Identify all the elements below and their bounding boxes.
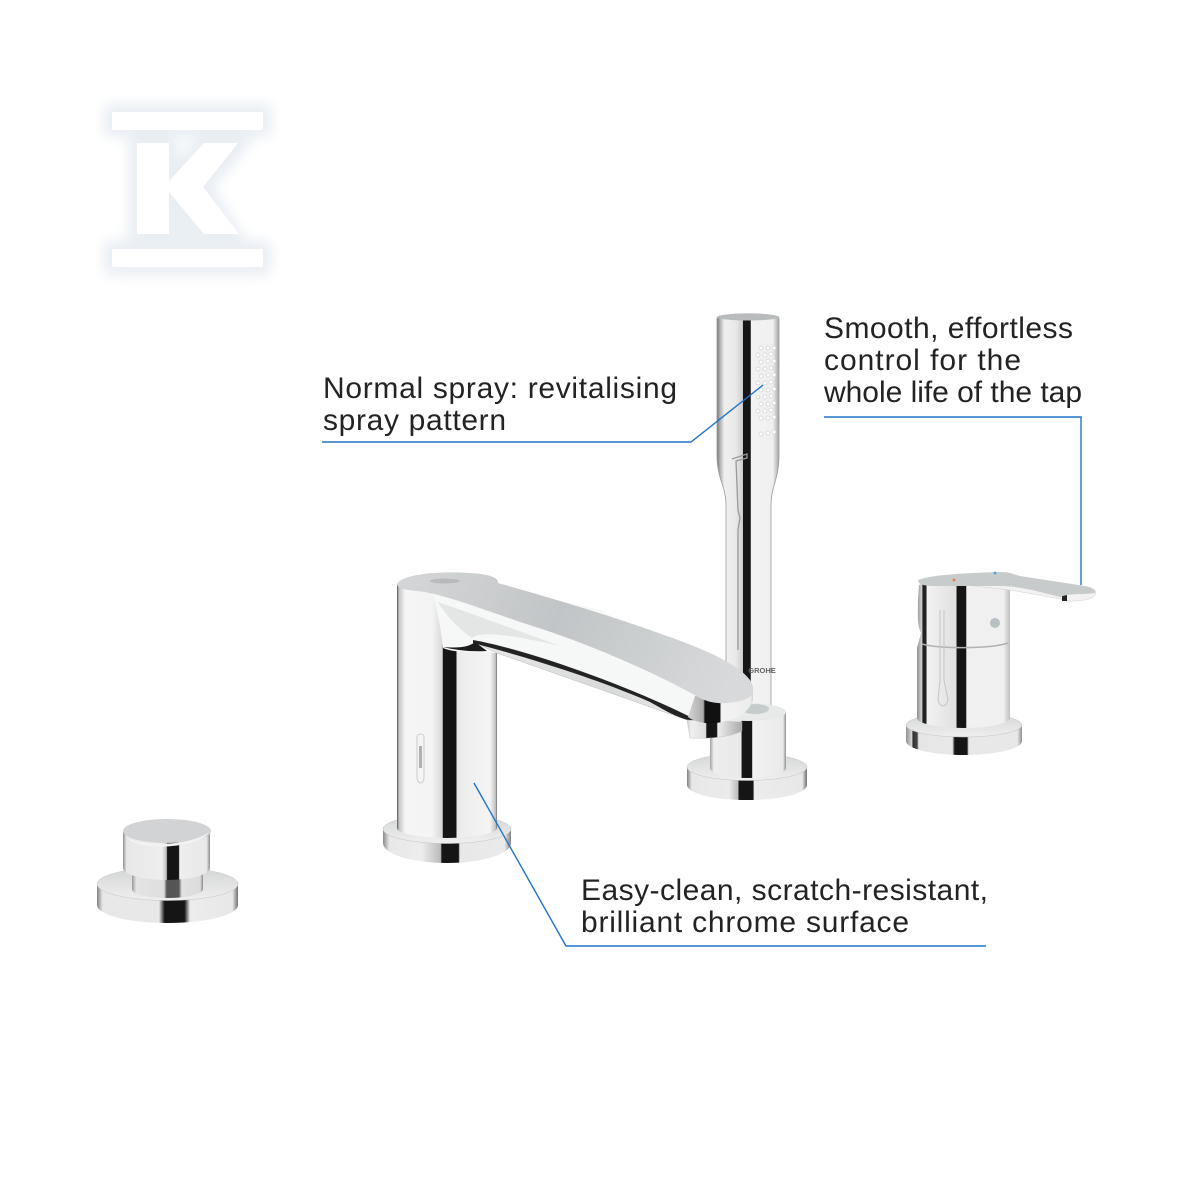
spout top plate: [397, 572, 753, 703]
shell main white surface: [432, 580, 753, 720]
spray nozzles: [756, 346, 776, 436]
body shoulder shadow: [443, 642, 487, 651]
shower holder column: [710, 703, 786, 778]
body release lever: [417, 734, 424, 783]
right mixer body: [917, 582, 1010, 728]
spout rim: [688, 686, 753, 723]
under-spout dark line: [473, 640, 700, 722]
callout: smooth control text: whole life of the tap: [823, 376, 1082, 409]
mixer detail: [938, 610, 948, 706]
callout: smooth control text: control for the: [824, 344, 1021, 377]
callout: chrome surface text: [581, 874, 988, 939]
under-spout band: [480, 645, 700, 722]
callout: normal spray text: [323, 372, 677, 437]
shower holder base: [687, 754, 807, 800]
hand shower: [717, 314, 779, 708]
right mixer base: [906, 713, 1022, 755]
shower slider: [732, 454, 747, 650]
callout: smooth control text: Smooth, effortless: [824, 312, 1073, 345]
spout lower shell: [432, 580, 753, 738]
callout: normal spray text: spray pattern: [323, 404, 506, 437]
leader line: chrome surface: [474, 783, 986, 946]
right mixer lever: [918, 572, 1096, 601]
drain button cap: [123, 819, 211, 880]
drain button stem: [132, 872, 203, 898]
leader line: normal spray: [322, 385, 763, 442]
drain button base: [97, 868, 238, 923]
spout nozzle: [687, 720, 742, 738]
callout: normal spray text: Normal spray: revitalising: [323, 372, 677, 405]
callout: chrome surface text: Easy-clean, scratch-resistant,: [581, 874, 988, 907]
callout: chrome surface text: brilliant chrome surface: [581, 906, 909, 939]
left tap body: [397, 585, 497, 838]
watermark logo: [112, 112, 263, 267]
mixer groove: [922, 643, 1008, 648]
shell shaded facet: [438, 602, 560, 646]
mixer button: [990, 618, 1000, 628]
leader line: smooth control: [824, 417, 1081, 585]
callout: smooth control text: [823, 312, 1082, 409]
shower brand mark: GROHE: [748, 666, 776, 675]
left tap base: [383, 814, 511, 863]
